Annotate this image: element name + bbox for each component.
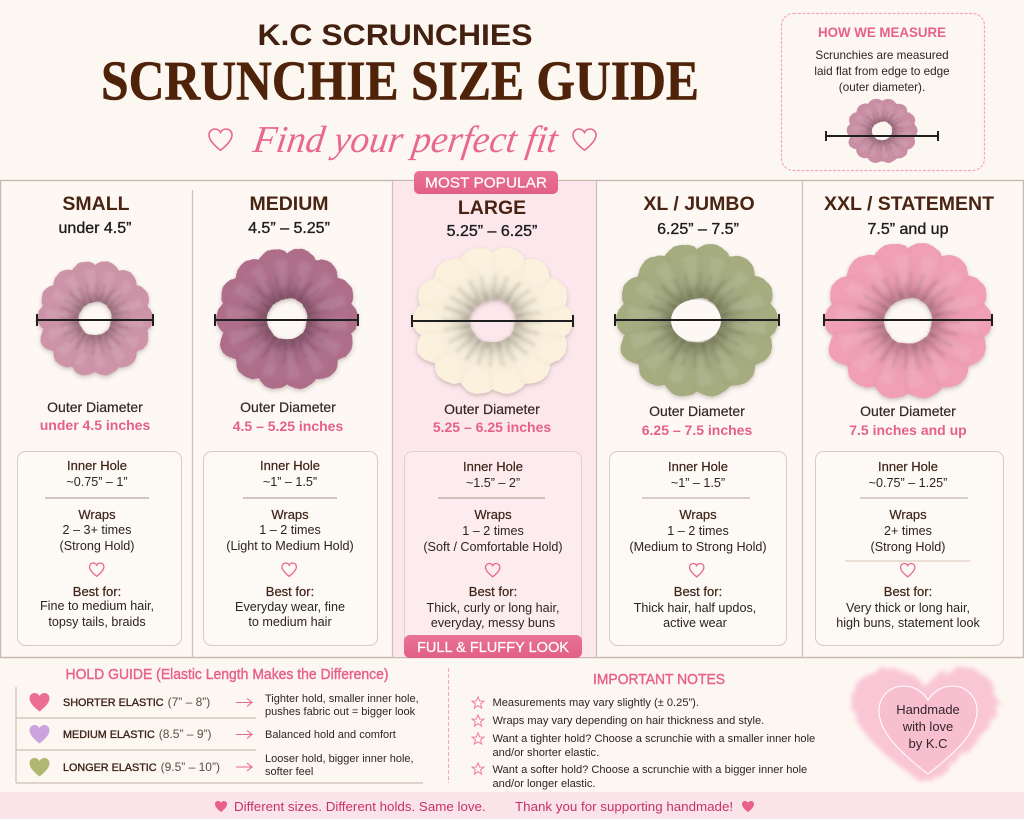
card: xxl details: 2+ times (884, 524, 932, 538)
card: large details: Inner Hole (463, 459, 523, 474)
column: small: under 4.5” (59, 220, 131, 237)
card: large details: (Soft / Comfortable Hold) (423, 540, 563, 554)
column: xxl statement: 7.5 inches and up (849, 422, 967, 438)
panel: how we measure: Scrunchies are measured (815, 49, 949, 62)
panel: how we measure (782, 14, 984, 170)
card: medium details: Inner Hole (260, 458, 320, 473)
diameter line (615, 314, 779, 326)
brand name: K.C SCRUNCHIES (258, 19, 532, 52)
footer band: Different sizes. Different holds. Same love. (234, 799, 486, 814)
panel: how we measure: laid flat from edge to edge (814, 65, 950, 78)
card: large details: Best for: (469, 584, 517, 599)
card: large details: Thick, curly or long hair, (427, 601, 559, 615)
card: small details: Wraps (78, 507, 116, 522)
card: small details: ~0.75” – 1” (66, 475, 128, 489)
row: longer elastic: LONGER ELASTIC (9.5” – 10”) (63, 760, 220, 774)
card: xl details: ~1” – 1.5” (671, 476, 725, 490)
card: xxl details: (Strong Hold) (871, 540, 945, 554)
card: medium details: Wraps (271, 507, 309, 522)
card: xxl details: Inner Hole (878, 459, 938, 474)
card: xxl details: high buns, statement look (836, 616, 980, 630)
column: medium (204, 193, 378, 646)
column: medium: 4.5” – 5.25” (248, 220, 330, 237)
column: xxl statement: XXL / STATEMENT (824, 193, 994, 215)
diameter line (824, 314, 992, 326)
main title: SCRUNCHIE SIZE GUIDE (101, 50, 699, 112)
card: large details (404, 452, 582, 646)
card: xxl details: Best for: (884, 584, 932, 599)
column: small: Outer Diameter (47, 399, 143, 415)
column: xxl statement: 7.5” and up (868, 221, 949, 238)
column: xl jumbo: 6.25” – 7.5” (657, 221, 739, 238)
badge: handmade with love heart (852, 668, 998, 785)
note 3: Want a tighter hold? Choose a scrunchie with a smaller inner hole (492, 733, 815, 745)
scrunchie: medium (230, 262, 344, 376)
panel: hold guide: HOLD GUIDE (Elastic Length Makes the Difference) (66, 667, 388, 683)
icon: measured scrunchie (826, 105, 938, 157)
size comparison table (0, 171, 1024, 658)
card: medium details: Best for: (266, 584, 314, 599)
note 4: and/or longer elastic. (492, 778, 596, 790)
column: xxl statement: Outer Diameter (860, 403, 956, 419)
card: medium details: Everyday wear, fine (235, 600, 345, 614)
column: xxl statement (816, 193, 1004, 646)
card: medium details: (Light to Medium Hold) (226, 539, 354, 553)
badge: most popular (414, 171, 558, 194)
footer band (0, 792, 1024, 819)
scrunchie: small (48, 272, 142, 365)
card: xl details: 1 – 2 times (667, 524, 729, 538)
column: large: 5.25 – 6.25 inches (433, 419, 551, 435)
card: small details: Inner Hole (67, 458, 127, 473)
panel: hold guide (16, 667, 423, 783)
card: large details: Wraps (474, 507, 512, 522)
footer band: Thank you for supporting handmade! (515, 799, 733, 814)
panel: how we measure: HOW WE MEASURE (818, 24, 946, 40)
row: shorter elastic: Tighter hold, smaller inner hole, (265, 693, 419, 705)
card: medium details: 1 – 2 times (259, 523, 321, 537)
badge: full and fluffy look (404, 635, 582, 658)
card: small details: Best for: (73, 584, 121, 599)
row: medium elastic: MEDIUM ELASTIC (8.5” – 9”) (63, 727, 211, 741)
diameter line (37, 314, 153, 326)
scrunchie: xl (631, 258, 763, 383)
panel: important notes (472, 672, 815, 790)
column: xl jumbo: XL / JUMBO (643, 193, 755, 215)
note 3 (472, 733, 815, 759)
card: small details (18, 452, 182, 646)
badge: full and fluffy look: FULL & FLUFFY LOOK (417, 639, 569, 656)
column: large: LARGE (458, 197, 526, 219)
card: xl details: Wraps (679, 507, 717, 522)
panel: how we measure: (outer diameter). (839, 81, 925, 94)
note 2: Wraps may vary depending on hair thickness and style. (492, 715, 764, 727)
column: xl jumbo (610, 193, 786, 646)
note 3: and/or shorter elastic. (492, 747, 599, 759)
column: large: Outer Diameter (444, 401, 540, 417)
card: medium details: ~1” – 1.5” (263, 475, 317, 489)
card: large details: 1 – 2 times (462, 524, 524, 538)
row: medium elastic: Balanced hold and comfort (265, 729, 396, 741)
column: xl jumbo: 6.25 – 7.5 inches (642, 422, 752, 438)
card: xxl details: Wraps (889, 507, 927, 522)
card: xl details: Best for: (674, 584, 722, 599)
row: shorter elastic (30, 693, 419, 718)
badge: most popular: MOST POPULAR (425, 174, 547, 192)
row: longer elastic: Looser hold, bigger inner hole, (265, 753, 414, 765)
card: small details: Fine to medium hair, (40, 599, 154, 613)
row: longer elastic: softer feel (265, 766, 313, 778)
card: medium details (204, 452, 378, 646)
scrunchie: large (428, 261, 557, 381)
column: large: 5.25” – 6.25” (447, 223, 537, 240)
row: shorter elastic: SHORTER ELASTIC (7” – 8”) (63, 695, 210, 709)
column: medium: MEDIUM (249, 193, 329, 215)
card: xl details (610, 452, 786, 646)
row: shorter elastic: pushes fabric out = bigger look (265, 706, 416, 718)
badge: handmade with love heart: by K.C (908, 736, 948, 751)
column: small (18, 193, 182, 646)
badge: handmade with love heart: with love (902, 719, 953, 734)
column: small: SMALL (62, 193, 130, 215)
card: small details: (Strong Hold) (60, 539, 134, 553)
card: large details: everyday, messy buns (431, 616, 555, 630)
card: medium details: to medium hair (248, 615, 332, 629)
note 4: Want a softer hold? Choose a scrunchie with a bigger inner hole (492, 764, 807, 776)
highlighted large column (393, 181, 596, 657)
card: xl details: Inner Hole (668, 459, 728, 474)
column: small: under 4.5 inches (40, 417, 150, 433)
row: longer elastic (30, 753, 414, 778)
card: xxl details: Very thick or long hair, (846, 601, 970, 615)
card: small details: topsy tails, braids (48, 615, 146, 629)
badge: handmade with love heart: Handmade (896, 702, 960, 717)
tagline with hearts: Find your perfect fit (250, 119, 562, 161)
note 4 (472, 763, 807, 790)
row: medium elastic (30, 725, 396, 744)
scrunchie: xxl (840, 257, 976, 385)
diameter line (412, 315, 573, 327)
column: large (404, 171, 582, 658)
column: medium: 4.5 – 5.25 inches (233, 418, 343, 434)
header (101, 19, 699, 161)
card: large details: ~1.5” – 2” (466, 476, 520, 490)
panel: important notes: IMPORTANT NOTES (593, 672, 725, 688)
card: xl details: active wear (663, 616, 727, 630)
card: xl details: Thick hair, half updos, (634, 601, 756, 615)
diameter line (215, 314, 358, 326)
column: xl jumbo: Outer Diameter (649, 403, 745, 419)
card: xxl details: ~0.75” – 1.25” (869, 476, 947, 490)
note 1: Measurements may vary slightly (± 0.25”). (492, 697, 699, 709)
card: xl details: (Medium to Strong Hold) (629, 540, 767, 554)
card: small details: 2 – 3+ times (63, 523, 131, 537)
card: xxl details (816, 452, 1004, 646)
column: medium: Outer Diameter (240, 399, 336, 415)
